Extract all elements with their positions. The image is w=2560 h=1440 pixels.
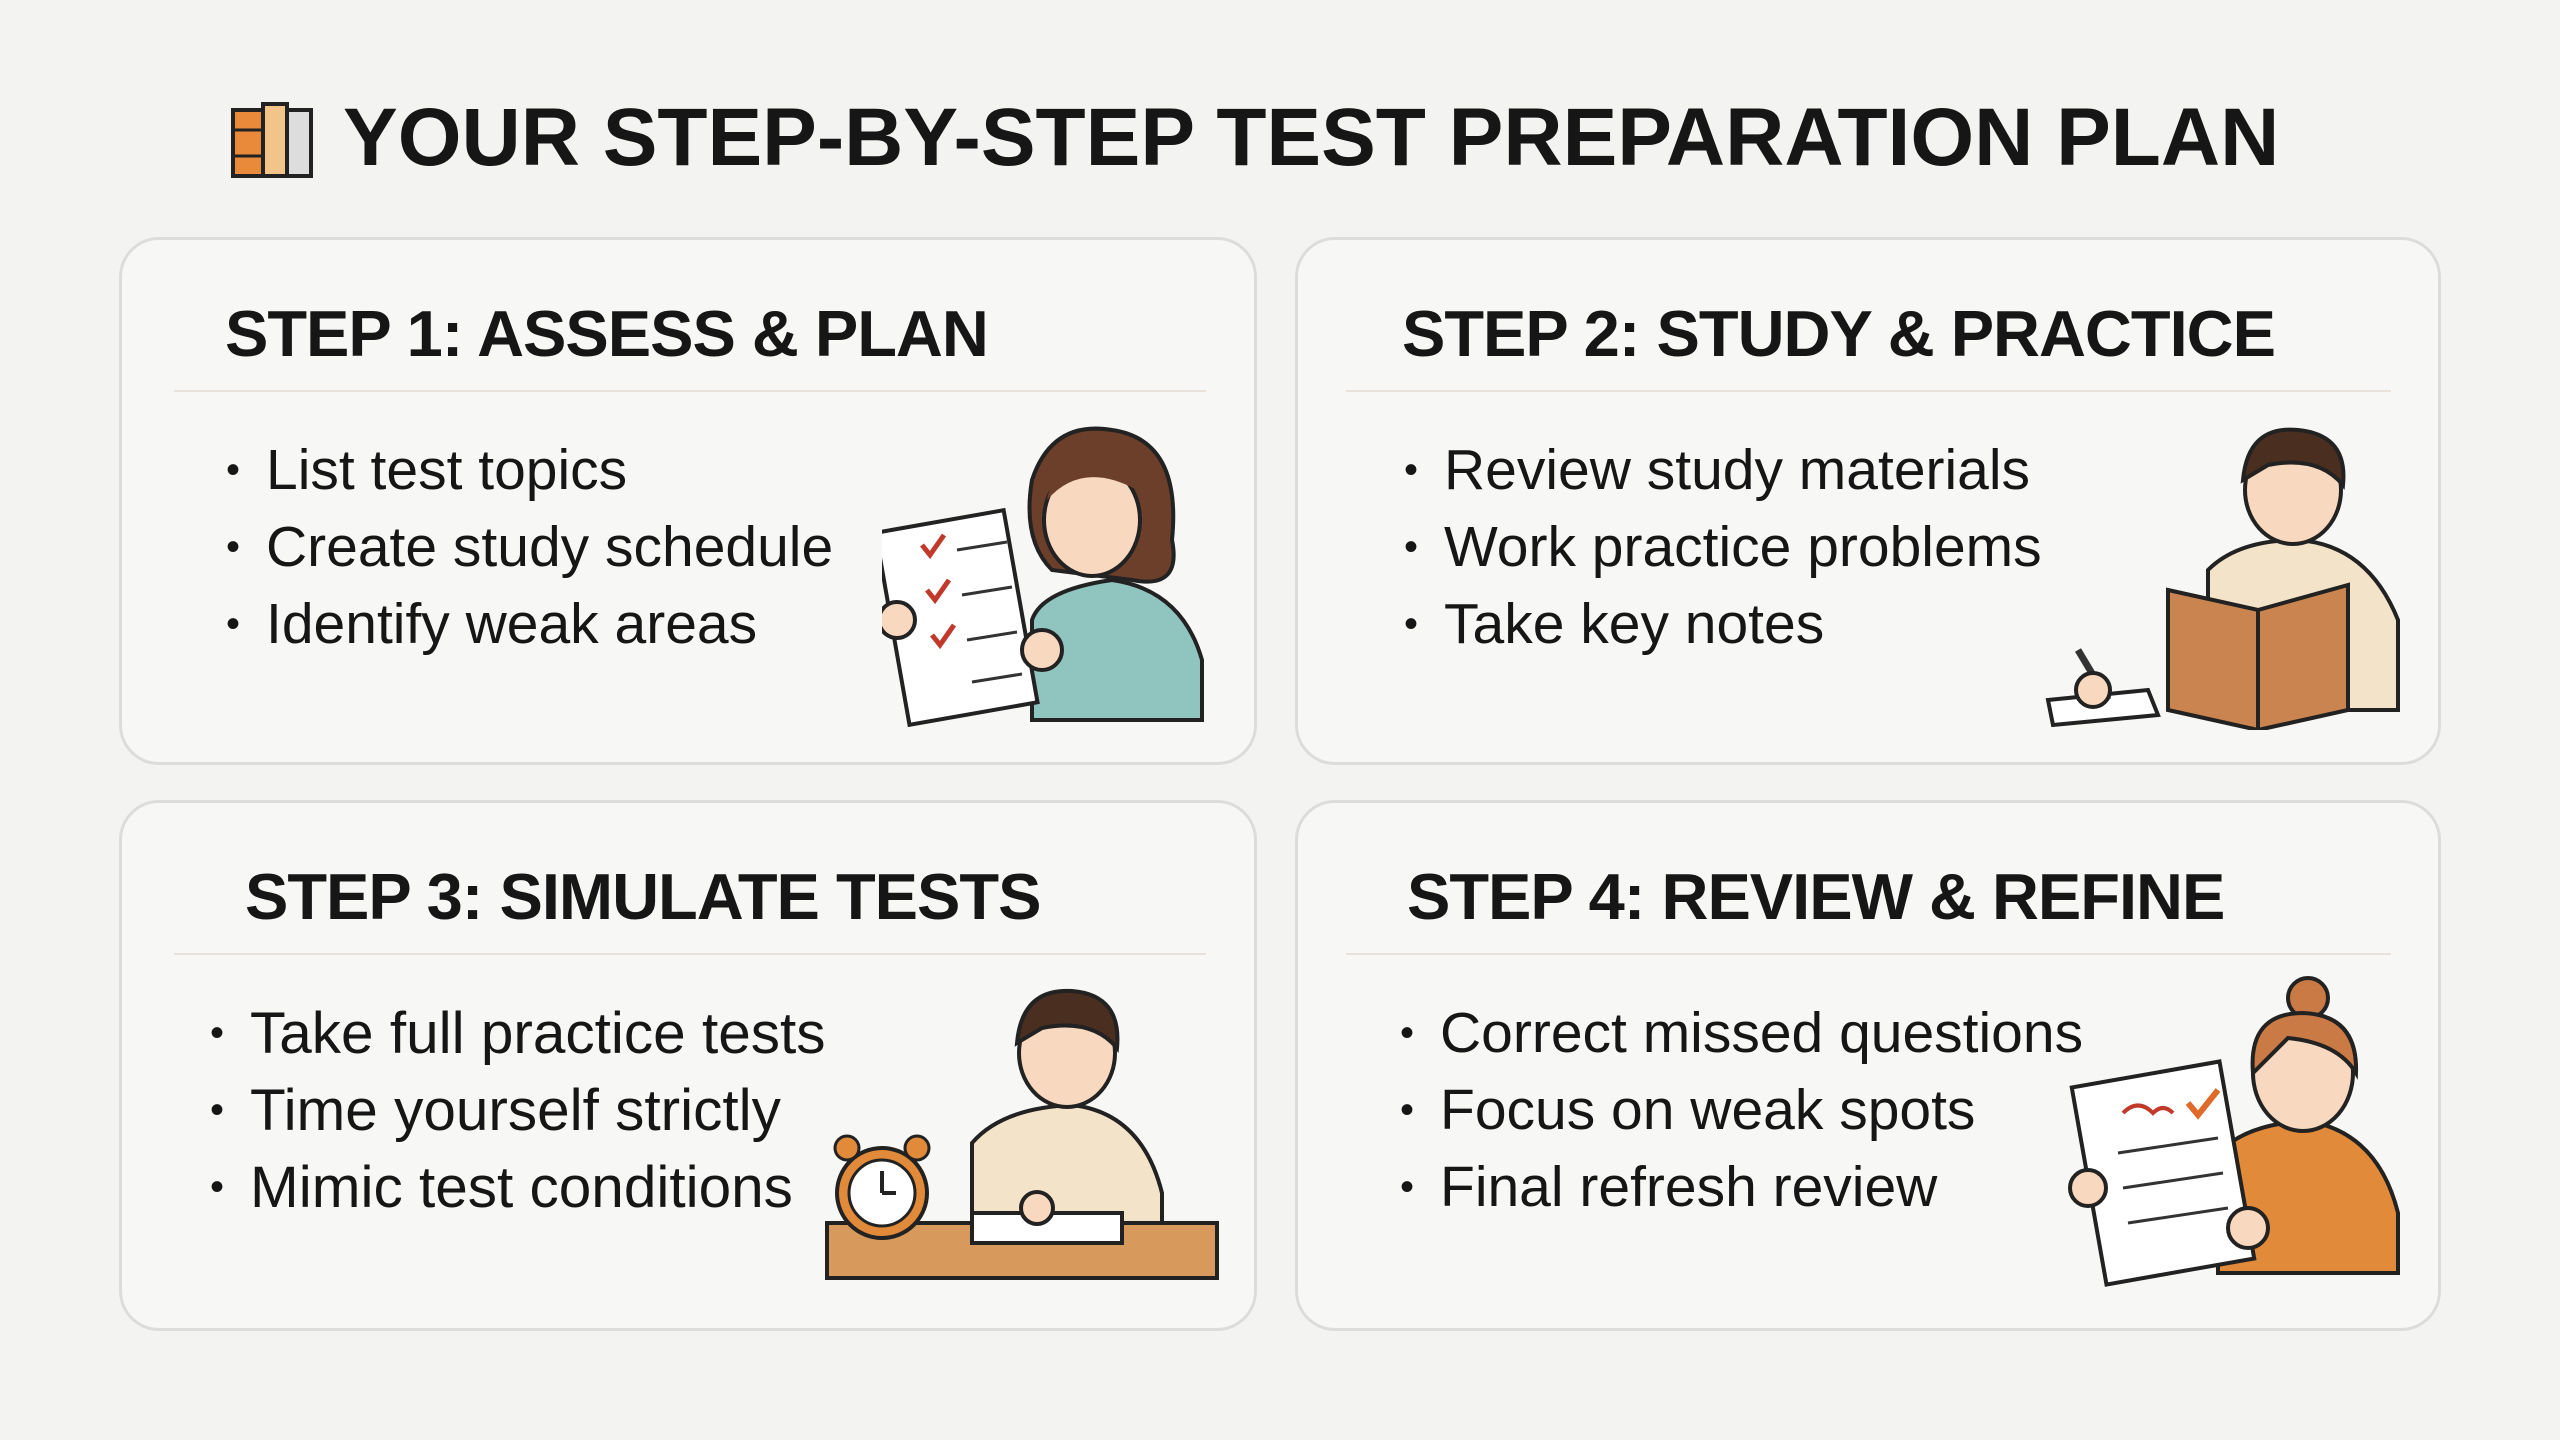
heading: step 2: STEP 2: STUDY & PRACTICE (1402, 297, 2275, 370)
heading: step 3: STEP 3: SIMULATE TESTS (245, 860, 1040, 933)
illustration: boy reading book (2046, 428, 2400, 730)
bullets: step 2: Work practice problems (1444, 515, 2042, 579)
heading: step 1: STEP 1: ASSESS & PLAN (225, 297, 988, 370)
panel: step 3 (119, 800, 1257, 1331)
bullets: step 1: List test topics (266, 438, 627, 502)
bullets: step 2 (1406, 438, 2042, 656)
icon: books (231, 102, 313, 178)
illustration: boy with clock at desk (825, 988, 1219, 1280)
bullets: step 2: Take key notes (1444, 592, 1824, 656)
bullets: step 1 (228, 438, 833, 656)
bullets: step 4: Focus on weak spots (1440, 1078, 1975, 1142)
bullets: step 3: Mimic test conditions (250, 1155, 793, 1220)
bullets: step 2: Review study materials (1444, 438, 2030, 502)
bullets: step 4: Final refresh review (1440, 1155, 1937, 1219)
bullets: step 4: Correct missed questions (1440, 1001, 2083, 1065)
panel: step 4 (1295, 800, 2441, 1331)
bullets: step 3 (212, 1001, 826, 1220)
bullets: step 3: Time yourself strictly (250, 1078, 781, 1143)
heading: step 4: STEP 4: REVIEW & REFINE (1407, 860, 2224, 933)
bullets: step 1: Identify weak areas (266, 592, 757, 656)
panel: step 1 (119, 237, 1257, 765)
bullets: step 4 (1402, 1001, 2083, 1219)
illustration: girl with checklist (882, 426, 1204, 728)
title: YOUR STEP-BY-STEP TEST PREPARATION PLAN (343, 92, 2279, 183)
bullets: step 3: Take full practice tests (250, 1001, 826, 1066)
panel: step 2 (1295, 237, 2441, 765)
illustration: woman with corrected paper (2068, 976, 2400, 1287)
bullets: step 1: Create study schedule (266, 515, 833, 579)
